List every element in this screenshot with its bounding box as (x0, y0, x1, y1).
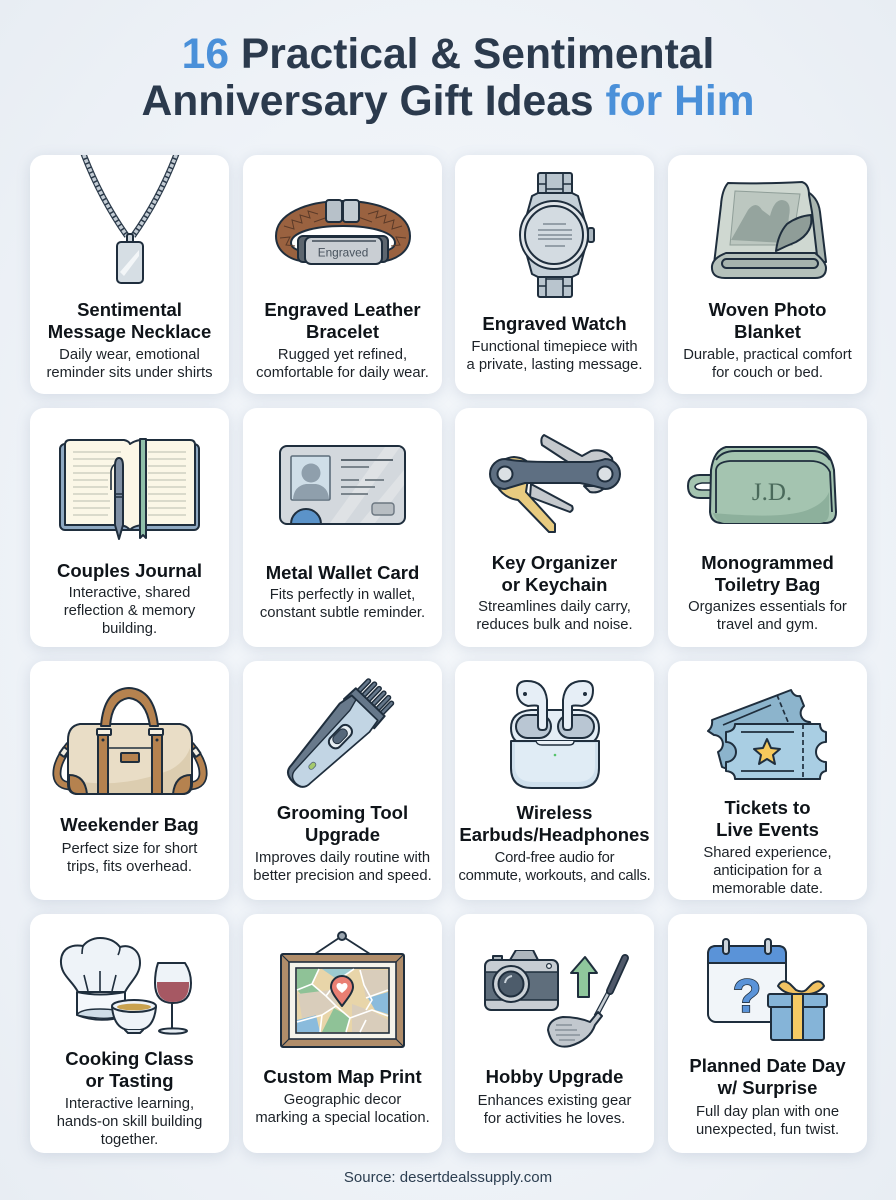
description: date day: unexpected, fun twist. (696, 1122, 839, 1138)
description: tickets (703, 845, 832, 897)
title: toiletry bag: Toiletry Bag (715, 574, 820, 595)
description: journal: reflection & memory (64, 603, 195, 619)
description: cooking class (57, 1096, 202, 1148)
title: toiletry bag: Monogrammed (701, 552, 834, 573)
description: weekender bag: trips, fits overhead. (67, 859, 192, 875)
title: key organizer (492, 552, 617, 595)
description: toiletry bag (688, 599, 847, 633)
title: Anniversary Gift Ideas for Him (141, 77, 755, 125)
title: cooking class: Cooking Class (65, 1048, 194, 1069)
panel: couples journal (30, 408, 229, 647)
description: cooking class: together. (101, 1132, 158, 1148)
description: key organizer: Streamlines daily carry, (478, 599, 631, 615)
description: toiletry bag: travel and gym. (717, 617, 818, 633)
description: wallet card: Fits perfectly in wallet, (270, 587, 415, 603)
title: 16 Practical & Sentimental (182, 30, 714, 78)
description: watch: Functional timepiece with (471, 339, 638, 355)
title: date day: w/ Surprise (718, 1077, 817, 1098)
description: map print (255, 1092, 430, 1126)
panel: grooming tool upgrade (243, 661, 442, 900)
description: necklace (46, 347, 213, 381)
panel: sentimental message necklace (30, 155, 229, 394)
title: earbuds: Wireless (517, 802, 592, 823)
description: blanket: Durable, practical comfort (683, 347, 852, 363)
title: necklace: Message Necklace (48, 321, 211, 342)
icon: blanket (710, 181, 827, 279)
icon: earbuds (510, 680, 600, 789)
panel: key organizer (455, 408, 654, 647)
panel: woven photo blanket (668, 155, 867, 394)
description: grooming tool (253, 850, 432, 884)
source footer: Source: desertdealssupply.com (344, 1168, 552, 1186)
description: wallet card (260, 587, 425, 621)
icon: calendar and gift (705, 936, 830, 1044)
description: earbuds: Cord-free audio for (495, 850, 614, 866)
description: blanket: for couch or bed. (712, 365, 823, 381)
title: blanket (708, 299, 826, 342)
title: cooking class: or Tasting (85, 1070, 174, 1091)
description: journal: Interactive, shared (69, 585, 190, 601)
description: weekender bag (62, 841, 198, 875)
title: key organizer: or Keychain (502, 574, 607, 595)
title: earbuds: Earbuds/Headphones (459, 824, 650, 845)
description: grooming tool: better precision and speed. (253, 868, 432, 884)
description: hobby upgrade (478, 1093, 632, 1127)
description: date day (668, 1103, 867, 1139)
description: necklace: reminder sits under shirts (46, 365, 213, 381)
description: map print: Geographic decor (284, 1092, 401, 1108)
description: hobby upgrade: for activities he loves. (484, 1111, 625, 1127)
panel: cooking class or tasting (30, 914, 229, 1153)
title: journal: Couples Journal (57, 560, 202, 581)
description: blanket (683, 347, 852, 381)
icon: bracelet (275, 199, 411, 265)
description: earbuds (458, 850, 651, 884)
title: weekender bag: Weekender Bag (60, 814, 199, 835)
panel: weekender bag (30, 661, 229, 900)
icon: tickets (707, 689, 827, 780)
title: bracelet (264, 299, 421, 342)
icon: toiletry bag (687, 446, 837, 524)
title: grooming tool: Upgrade (305, 824, 380, 845)
panel: engraved watch (455, 155, 654, 394)
title: cooking class (65, 1048, 194, 1091)
title: date day: Planned Date Day (689, 1055, 846, 1076)
icon: necklace (80, 155, 180, 284)
icon: camera, arrow and golf club (484, 950, 629, 1048)
description: weekender bag: Perfect size for short (62, 841, 197, 857)
panel: hobby upgrade (455, 914, 654, 1153)
description: bracelet (256, 347, 429, 381)
title: grooming tool (277, 802, 408, 845)
description: date day: Full day plan with one (696, 1104, 839, 1120)
icon: watch (519, 172, 595, 298)
title: blanket: Blanket (734, 321, 801, 342)
panel: metal wallet card (243, 408, 442, 647)
description: journal (64, 585, 196, 637)
icon: calendar and gift: ? (733, 969, 761, 1022)
description: grooming tool: Improves daily routine with (255, 850, 430, 866)
description: map print: marking a special location. (255, 1110, 430, 1126)
icon: framed map (280, 931, 405, 1048)
description: bracelet: comfortable for daily wear. (256, 365, 429, 381)
title: bracelet: Bracelet (306, 321, 379, 342)
panel: custom map print (243, 914, 442, 1153)
title: map print: Custom Map Print (263, 1066, 422, 1087)
description: key organizer: reduces bulk and noise. (476, 617, 633, 633)
description: watch (466, 339, 642, 373)
icon: journal (59, 438, 200, 540)
panel: monogrammed toiletry bag (668, 408, 867, 647)
title: blanket: Woven Photo (709, 299, 826, 320)
description: earbuds: commute, workouts, and calls. (458, 868, 651, 884)
panel: tickets to live events (668, 661, 867, 900)
title: tickets: Live Events (716, 819, 819, 840)
icon: toiletry bag: J.D. (752, 479, 792, 506)
title: necklace: Sentimental (77, 299, 182, 320)
title: earbuds (459, 802, 650, 845)
description: toiletry bag: Organizes essentials for (688, 599, 847, 615)
description: tickets: anticipation for a (713, 863, 822, 879)
description: tickets: memorable date. (712, 881, 823, 897)
icon: wallet card (279, 445, 406, 525)
icon: chef hat, bowl and wine (60, 937, 192, 1035)
title (141, 30, 755, 125)
title: date day (668, 1055, 867, 1099)
title: necklace (48, 299, 211, 342)
title: watch: Engraved Watch (482, 313, 627, 334)
title: bracelet: Engraved Leather (264, 299, 421, 320)
description: cooking class: hands-on skill building (57, 1114, 202, 1130)
icon: bracelet: Engraved (318, 246, 368, 260)
title: hobby upgrade: Hobby Upgrade (486, 1066, 623, 1087)
title: tickets (716, 797, 819, 840)
icon: key organizer (489, 434, 621, 533)
description: cooking class: Interactive learning, (65, 1096, 194, 1112)
title: toiletry bag (701, 552, 834, 595)
description: journal: building. (102, 621, 157, 637)
panel: engraved leather bracelet (243, 155, 442, 394)
title: wallet card: Metal Wallet Card (266, 562, 419, 583)
description: necklace: Daily wear, emotional (59, 347, 200, 363)
description: watch: a private, lasting message. (466, 357, 642, 373)
description: hobby upgrade: Enhances existing gear (478, 1093, 631, 1109)
icon: weekender bag (52, 687, 208, 795)
title: key organizer: Key Organizer (492, 552, 617, 573)
description: bracelet: Rugged yet refined, (278, 347, 407, 363)
panel: planned date day with surprise (668, 914, 867, 1153)
icon: hair clipper (286, 678, 394, 788)
panel: wireless earbuds (455, 661, 654, 900)
title: tickets: Tickets to (724, 797, 811, 818)
title: grooming tool: Grooming Tool (277, 802, 408, 823)
description: wallet card: constant subtle reminder. (260, 605, 425, 621)
description: key organizer (476, 599, 633, 633)
description: tickets: Shared experience, (703, 845, 832, 861)
